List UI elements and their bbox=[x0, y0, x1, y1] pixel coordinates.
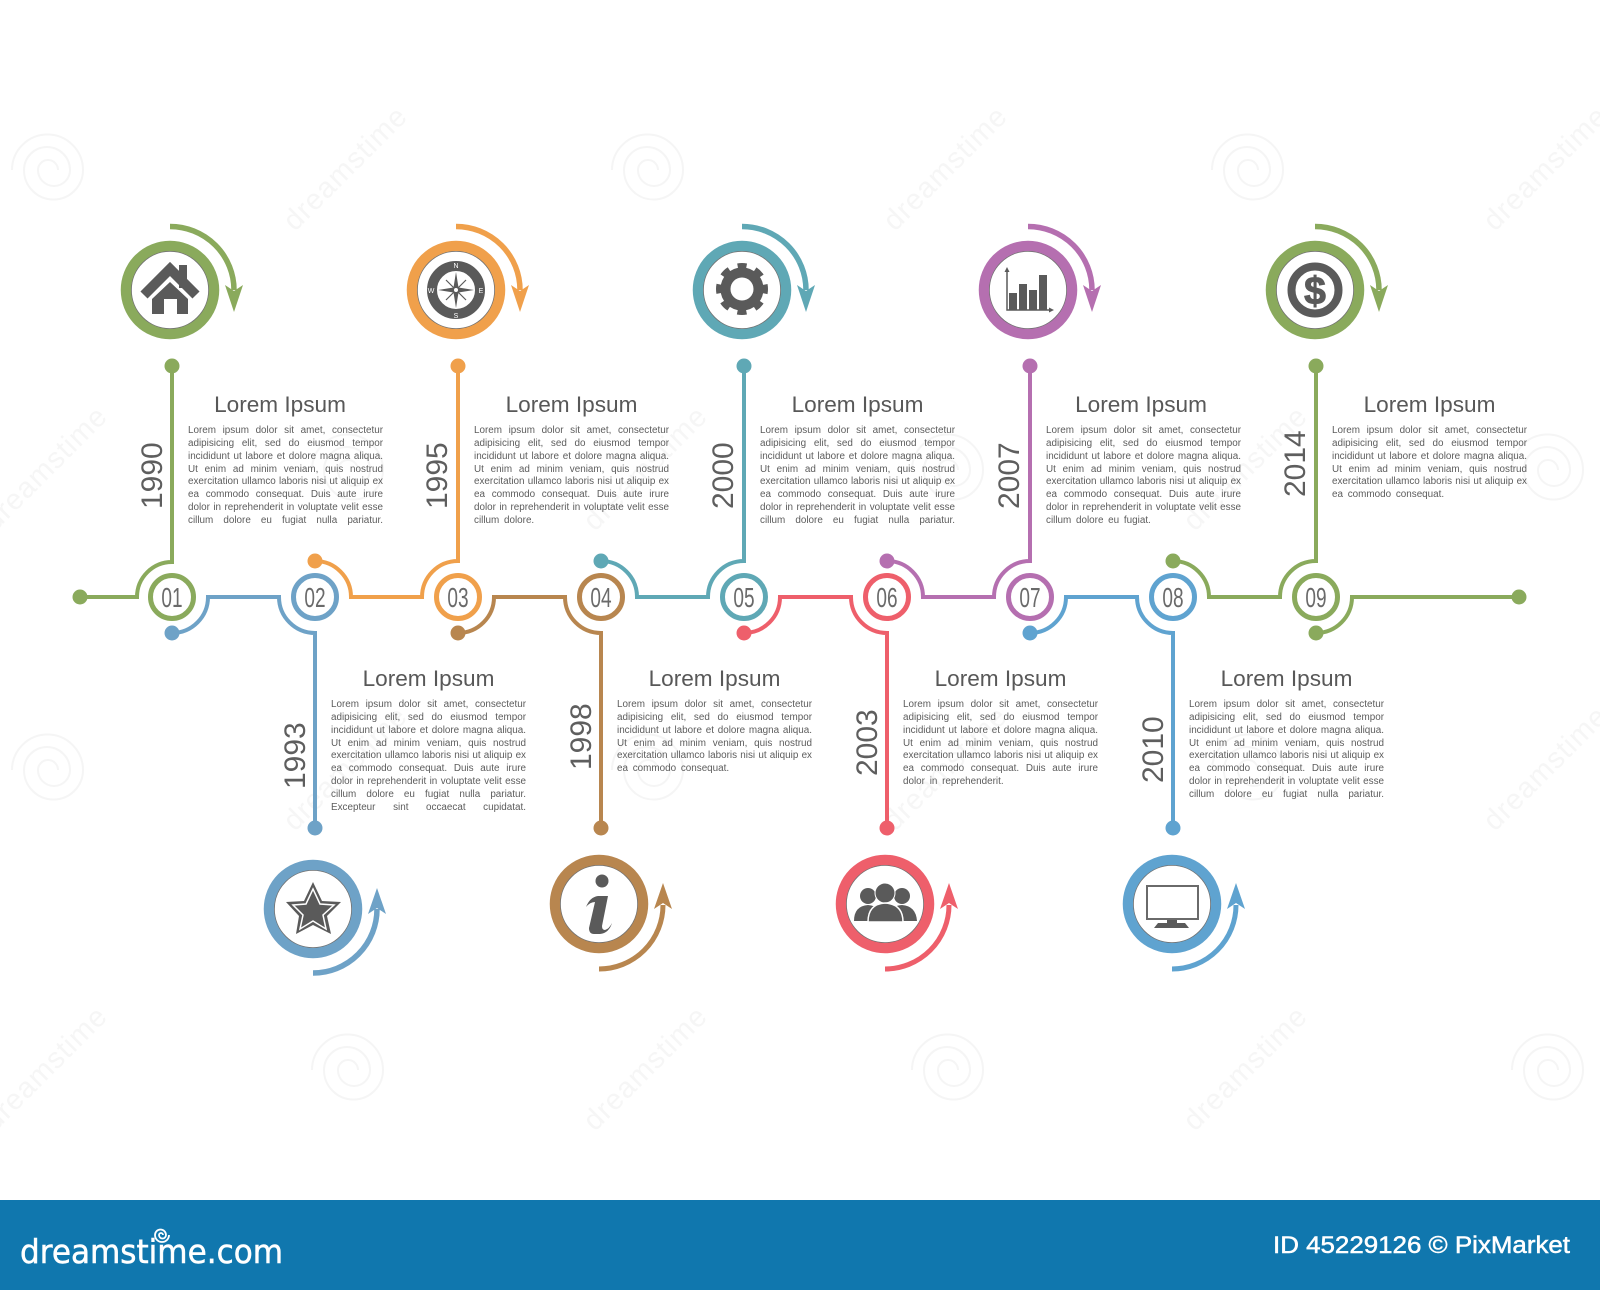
panel: 2003 text: ea commodo consequat. Duis aute irure bbox=[903, 763, 1098, 774]
panel: 1990 text: ea commodo consequat. Duis aute irure bbox=[188, 489, 383, 500]
panel: 2007 text: Ut enim ad minim veniam, quis nostrud bbox=[1046, 464, 1241, 475]
panel: 2000 text: adipisicing elit, sed do eiusmod tempor bbox=[760, 438, 955, 449]
node 05 bbox=[722, 576, 766, 618]
icon: house in green ring with arrow bbox=[126, 226, 243, 334]
icon: compass in orange ring with arrow: W bbox=[428, 288, 435, 295]
node 07: 07 bbox=[1019, 582, 1041, 614]
panel: 2003 text: exercitation ullamco laboris nisi ut aliquip ex bbox=[903, 750, 1098, 761]
heading: Lorem Ipsum bbox=[1364, 392, 1495, 417]
panel: 2000 text: Ut enim ad minim veniam, quis nostrud bbox=[760, 464, 955, 475]
panel: 1995 text: ea commodo consequat. Duis aute irure bbox=[474, 489, 669, 500]
panel: 2010 text: Lorem ipsum dolor sit amet, consectetur bbox=[1189, 699, 1384, 710]
panel: 1993 text: Lorem ipsum dolor sit amet, consectetur bbox=[331, 699, 526, 710]
panel: 1990 text: dolor in reprehenderit in voluptate velit esse bbox=[188, 502, 383, 513]
panel: 2014 text: Ut enim ad minim veniam, quis nostrud bbox=[1332, 464, 1527, 475]
node 05: 05 bbox=[733, 582, 755, 614]
panel: 2014 text: ea commodo consequat. bbox=[1332, 489, 1444, 500]
icon: monitor in blue ring with arrow bbox=[1128, 860, 1245, 969]
node 06 bbox=[866, 576, 908, 618]
panel: 2007 text: exercitation ullamco laboris nisi ut aliquip ex bbox=[1046, 476, 1241, 487]
connector 06 red bbox=[736, 597, 894, 836]
panel: 2007 text bbox=[1046, 392, 1241, 526]
panel: 2010 text: cillum dolore eu fugiat nulla pariatur. bbox=[1189, 789, 1384, 800]
panel: 2003 text: incididunt ut labore et dolore magna aliqua. bbox=[903, 725, 1098, 736]
watermark pattern: dreamstime bbox=[577, 1000, 714, 1137]
connector 08 blue bbox=[1022, 597, 1180, 836]
heading: Lorem Ipsum bbox=[506, 392, 637, 417]
node 04 bbox=[580, 576, 622, 618]
panel: 2010 text bbox=[1189, 666, 1384, 800]
panel: 1995 text: cillum dolore. bbox=[474, 515, 534, 526]
panel: 1998 text: adipisicing elit, sed do eiusmod tempor bbox=[617, 712, 812, 723]
node 09 bbox=[1294, 576, 1338, 618]
panel: 2007 text: adipisicing elit, sed do eiusmod tempor bbox=[1046, 438, 1241, 449]
panel: 1990 text: Lorem ipsum dolor sit amet, consectetur bbox=[188, 425, 383, 436]
panel: 1995 text: incididunt ut labore et dolore magna aliqua. bbox=[474, 451, 669, 462]
node 04: 04 bbox=[590, 582, 612, 614]
panel: 1998 text: Ut enim ad minim veniam, quis nostrud bbox=[617, 738, 812, 749]
year 2003: 2003 bbox=[851, 709, 884, 776]
panel: 2007 text: dolor in reprehenderit in voluptate velit esse bbox=[1046, 502, 1241, 513]
panel: 1993 text: adipisicing elit, sed do eiusmod tempor bbox=[331, 712, 526, 723]
watermark pattern: dreamstime bbox=[577, 400, 714, 537]
panel: 2003 text: dolor in reprehenderit. bbox=[903, 776, 1004, 787]
node 02 bbox=[294, 576, 336, 618]
panel: 2003 text: Ut enim ad minim veniam, quis nostrud bbox=[903, 738, 1098, 749]
node 01 bbox=[150, 576, 194, 618]
watermark pattern: dreamstime bbox=[277, 100, 414, 237]
panel: 2007 text: ea commodo consequat. Duis aute irure bbox=[1046, 489, 1241, 500]
connector 02 blue bbox=[164, 597, 322, 836]
panel: 2007 text: incididunt ut labore et dolore magna aliqua. bbox=[1046, 451, 1241, 462]
panel: 1990 text: incididunt ut labore et dolore magna aliqua. bbox=[188, 451, 383, 462]
node 08 bbox=[1152, 576, 1194, 618]
panel: 2003 text: Lorem ipsum dolor sit amet, consectetur bbox=[903, 699, 1098, 710]
panel: 1990 text: exercitation ullamco laboris nisi ut aliquip ex bbox=[188, 476, 383, 487]
icon: dollar coin in green ring with arrow: $ bbox=[1304, 270, 1326, 313]
icon: compass in orange ring with arrow bbox=[412, 226, 529, 334]
node 01: 01 bbox=[161, 582, 183, 614]
panel: 1990 text bbox=[188, 392, 383, 526]
node 03 bbox=[436, 576, 480, 618]
panel: 1995 text: Lorem ipsum dolor sit amet, consectetur bbox=[474, 425, 669, 436]
node 03: 03 bbox=[447, 582, 469, 614]
panel: 1995 text: adipisicing elit, sed do eiusmod tempor bbox=[474, 438, 669, 449]
panel: 2000 text: exercitation ullamco laboris nisi ut aliquip ex bbox=[760, 476, 955, 487]
year 1998: 1998 bbox=[565, 703, 598, 770]
connector 04 brown bbox=[450, 597, 608, 836]
heading: Lorem Ipsum bbox=[363, 666, 494, 691]
year 1995: 1995 bbox=[421, 442, 454, 509]
year 2010: 2010 bbox=[1137, 716, 1170, 783]
node 07 bbox=[1008, 576, 1052, 618]
icon: compass in orange ring with arrow: E bbox=[479, 288, 484, 295]
panel: 2010 text: adipisicing elit, sed do eiusmod tempor bbox=[1189, 712, 1384, 723]
panel: 2014 text: adipisicing elit, sed do eiusmod tempor bbox=[1332, 438, 1527, 449]
icon: gear in teal ring with arrow bbox=[698, 226, 815, 334]
year 2000: 2000 bbox=[707, 442, 740, 509]
watermark pattern: dreamstime bbox=[1177, 400, 1314, 537]
panel: 2010 text: exercitation ullamco laboris nisi ut aliquip ex bbox=[1189, 750, 1384, 761]
panel: 1998 text: exercitation ullamco laboris nisi ut aliquip ex bbox=[617, 750, 812, 761]
panel: 2000 text: ea commodo consequat. Duis aute irure bbox=[760, 489, 955, 500]
icon: compass in orange ring with arrow: N bbox=[453, 263, 459, 270]
panel: 2014 text: Lorem ipsum dolor sit amet, consectetur bbox=[1332, 425, 1527, 436]
heading: Lorem Ipsum bbox=[649, 666, 780, 691]
panel: 2000 text bbox=[760, 392, 955, 526]
heading: Lorem Ipsum bbox=[1075, 392, 1207, 417]
panel: 1993 text: ea commodo consequat. Duis aute irure bbox=[331, 763, 526, 774]
panel: 2010 text: Ut enim ad minim veniam, quis nostrud bbox=[1189, 738, 1384, 749]
footer logo: dreamstime.com bbox=[20, 1233, 283, 1271]
panel: 2010 text: incididunt ut labore et dolore magna aliqua. bbox=[1189, 725, 1384, 736]
panel: 2000 text: Lorem ipsum dolor sit amet, consectetur bbox=[760, 425, 955, 436]
panel: 1995 text bbox=[474, 392, 669, 526]
connector 03 orange bbox=[308, 358, 466, 597]
watermark pattern: dreamstime bbox=[877, 700, 1014, 837]
node 02: 02 bbox=[304, 582, 326, 614]
panel: 2014 text bbox=[1332, 392, 1527, 500]
panel: 1993 text: dolor in reprehenderit in voluptate velit esse bbox=[331, 776, 526, 787]
watermark pattern: dreamstime bbox=[1177, 1000, 1314, 1137]
panel: 1998 text: ea commodo consequat. bbox=[617, 763, 729, 774]
panel: 1998 text bbox=[617, 666, 812, 774]
panel: 2003 text bbox=[903, 666, 1098, 787]
heading: Lorem Ipsum bbox=[935, 666, 1066, 691]
panel: 1993 text bbox=[331, 666, 526, 813]
panel: 2003 text: adipisicing elit, sed do eiusmod tempor bbox=[903, 712, 1098, 723]
panel: 1993 text: incididunt ut labore et dolore magna aliqua. bbox=[331, 725, 526, 736]
year 1993: 1993 bbox=[279, 722, 312, 789]
panel: 2014 text: incididunt ut labore et dolore magna aliqua. bbox=[1332, 451, 1527, 462]
icon: dollar coin in green ring with arrow bbox=[1271, 226, 1388, 334]
panel: 2000 text: dolor in reprehenderit in voluptate velit esse bbox=[760, 502, 955, 513]
panel: 1998 text: Lorem ipsum dolor sit amet, consectetur bbox=[617, 699, 812, 710]
icon: info in brown ring with arrow bbox=[555, 860, 672, 969]
footer bar bbox=[0, 1200, 1600, 1290]
connector end green bbox=[1308, 590, 1526, 640]
panel: 1990 text: adipisicing elit, sed do eiusmod tempor bbox=[188, 438, 383, 449]
panel: 1990 text: cillum dolore eu fugiat nulla pariatur. bbox=[188, 515, 383, 526]
watermark pattern: dreamstime bbox=[877, 100, 1014, 237]
panel: 2000 text: incididunt ut labore et dolore magna aliqua. bbox=[760, 451, 955, 462]
heading: Lorem Ipsum bbox=[214, 392, 346, 417]
icon: compass in orange ring with arrow: S bbox=[454, 313, 459, 320]
panel: 1993 text: exercitation ullamco laboris nisi ut aliquip ex bbox=[331, 750, 526, 761]
icon: star in blue ring with arrow bbox=[269, 865, 386, 973]
panel: 2010 text: ea commodo consequat. Duis aute irure bbox=[1189, 763, 1384, 774]
panel: 1995 text: Ut enim ad minim veniam, quis nostrud bbox=[474, 464, 669, 475]
watermark pattern: dreamstime bbox=[277, 700, 414, 837]
panel: 2000 text: cillum dolore eu fugiat nulla pariatur. bbox=[760, 515, 955, 526]
node 06: 06 bbox=[876, 582, 898, 614]
year 2014: 2014 bbox=[1279, 430, 1312, 497]
panel: 1990 text: Ut enim ad minim veniam, quis nostrud bbox=[188, 464, 383, 475]
node 09: 09 bbox=[1305, 582, 1327, 614]
connector 01 green bbox=[72, 358, 180, 604]
connector 05 teal bbox=[594, 358, 752, 597]
panel: 1995 text: exercitation ullamco laboris nisi ut aliquip ex bbox=[474, 476, 669, 487]
year 2007: 2007 bbox=[993, 442, 1026, 509]
panel: 2007 text: Lorem ipsum dolor sit amet, consectetur bbox=[1046, 425, 1241, 436]
year 1990: 1990 bbox=[136, 442, 169, 509]
panel: 1993 text: Excepteur sint occaecat cupidatat. bbox=[331, 802, 526, 813]
panel: 2007 text: cillum dolore eu fugiat. bbox=[1046, 515, 1151, 526]
heading: Lorem Ipsum bbox=[792, 392, 923, 417]
panel: 1993 text: Ut enim ad minim veniam, quis nostrud bbox=[331, 738, 526, 749]
icon: people in red ring with arrow bbox=[841, 860, 958, 969]
panel: 1993 text: cillum dolore eu fugiat nulla pariatur. bbox=[331, 789, 526, 800]
panel: 2014 text: exercitation ullamco laboris nisi ut aliquip ex bbox=[1332, 476, 1527, 487]
panel: 2010 text: dolor in reprehenderit in voluptate velit esse bbox=[1189, 776, 1384, 787]
panel: 1998 text: incididunt ut labore et dolore magna aliqua. bbox=[617, 725, 812, 736]
connector 09 green bbox=[1166, 358, 1324, 597]
icon: bar chart in purple ring with arrow bbox=[984, 226, 1101, 334]
heading: Lorem Ipsum bbox=[1221, 666, 1352, 691]
footer image id: ID 45229126 © PixMarket bbox=[1273, 1232, 1570, 1259]
node 08: 08 bbox=[1162, 582, 1184, 614]
connector 07 purple bbox=[880, 358, 1038, 597]
panel: 1995 text: dolor in reprehenderit in voluptate velit esse bbox=[474, 502, 669, 513]
